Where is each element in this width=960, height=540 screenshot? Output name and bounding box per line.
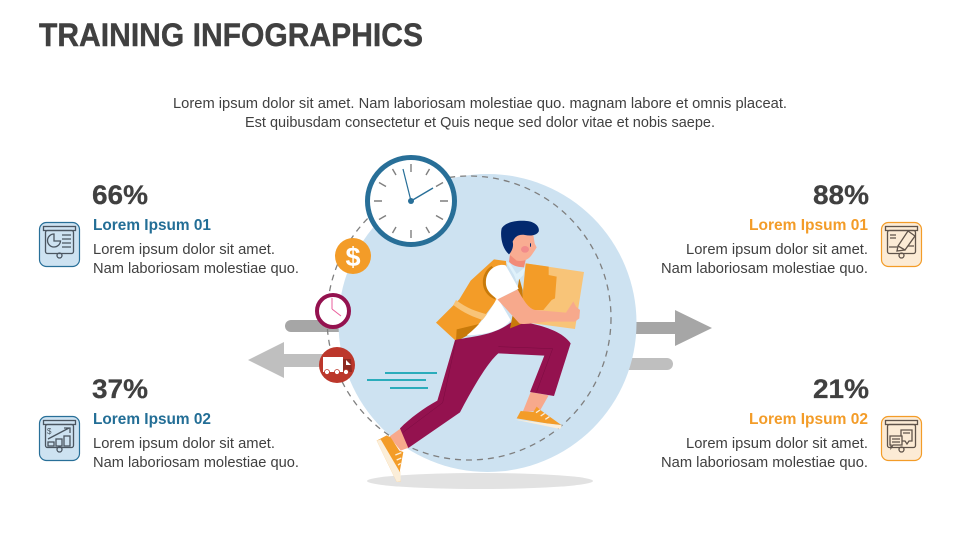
arrow: left gray bar xyxy=(285,320,345,332)
ear xyxy=(504,242,512,250)
eye xyxy=(530,243,531,247)
dashed orbit xyxy=(327,176,611,460)
collar xyxy=(506,262,525,282)
icon: large wall clock xyxy=(368,158,454,244)
vest front xyxy=(510,278,523,328)
speed lines xyxy=(367,372,437,389)
arrow: right pointing gray xyxy=(630,310,712,346)
icon: dollar coin xyxy=(335,238,371,274)
stat block: 88%: Lorem Ipsum 01 xyxy=(749,217,868,234)
icon: dollar coin: $ xyxy=(345,242,361,272)
parcel xyxy=(520,263,584,329)
icon: presentation board with marker xyxy=(882,222,922,266)
ground shadow xyxy=(367,473,593,489)
stat block: 88%: Nam laboriosam molestiae quo. xyxy=(661,261,868,277)
stat block: 88% xyxy=(661,180,869,277)
stat block: 37%: 37% xyxy=(92,374,148,404)
shirt sleeve xyxy=(486,265,519,299)
left shoe xyxy=(377,435,403,482)
stat block: 21%: Lorem ipsum dolor sit amet. xyxy=(686,436,868,452)
blue background circle xyxy=(338,174,636,472)
icon: presentation board with rising chart: $ xyxy=(47,427,52,436)
trousers xyxy=(400,323,571,448)
stat block: 66%: Nam laboriosam molestiae quo. xyxy=(93,261,299,277)
intro text: Est quibusdam consectetur et Quis neque sed dolor vitae et nobis saepe. xyxy=(245,115,715,131)
stat block: 37%: Lorem ipsum dolor sit amet. xyxy=(93,436,275,452)
arm and hand xyxy=(497,289,580,324)
icon: presentation board with rising chart xyxy=(40,416,80,460)
title: TRAINING INFOGRAPHICS xyxy=(39,17,423,53)
stat block: 37%: Lorem Ipsum 02 xyxy=(93,411,211,428)
stat block: 88%: Lorem ipsum dolor sit amet. xyxy=(686,242,868,258)
icon: small clock xyxy=(317,295,349,327)
head xyxy=(508,231,537,261)
hair xyxy=(501,221,539,254)
left leg skin xyxy=(389,428,409,451)
stat block: 37% xyxy=(92,374,299,471)
stat block: 21%: Lorem Ipsum 02 xyxy=(749,411,868,428)
icon: presentation board with speech bubbles xyxy=(882,416,922,460)
intro text: Lorem ipsum dolor sit amet. Nam laboriosam molestiae quo. magnam labore et omnis placeat. xyxy=(173,96,787,112)
arrow: left pointing gray xyxy=(248,342,335,378)
stat block: 66% xyxy=(92,180,299,277)
stat block: 66%: 66% xyxy=(92,180,148,210)
stat block: 66%: Lorem ipsum dolor sit amet. xyxy=(93,242,275,258)
right leg skin xyxy=(523,392,549,412)
safety vest back xyxy=(436,259,507,341)
icon: delivery truck xyxy=(319,347,355,383)
illustration: running man with parcel xyxy=(377,221,584,482)
stat block: 21%: Nam laboriosam molestiae quo. xyxy=(661,455,868,471)
cheek xyxy=(521,246,529,253)
arrow: right gray bar xyxy=(620,358,673,370)
intro text xyxy=(173,96,787,131)
stat block: 21%: 21% xyxy=(813,374,869,404)
stat block: 88%: 88% xyxy=(813,180,869,210)
stat block: 21% xyxy=(661,374,869,471)
right shoe xyxy=(514,407,562,429)
shirt torso xyxy=(467,297,511,335)
icon: presentation board with pie chart xyxy=(40,222,80,266)
stat block: 66%: Lorem Ipsum 01 xyxy=(93,217,211,234)
stat block: 37%: Nam laboriosam molestiae quo. xyxy=(93,455,299,471)
neck xyxy=(509,254,526,267)
